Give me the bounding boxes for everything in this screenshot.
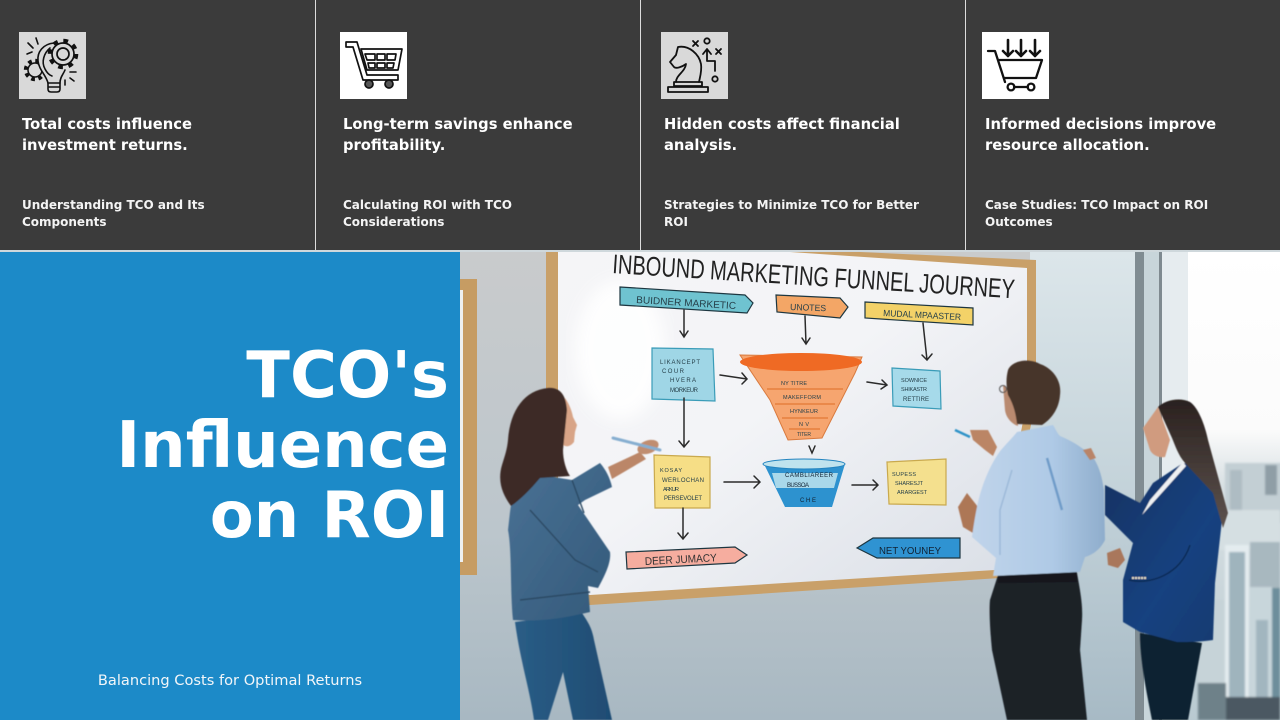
handwritten labels: BUIDNER MARKETIC [636, 295, 736, 312]
handwritten labels: DEER JUMACY [645, 552, 718, 568]
card 3: hidden costs [661, 32, 919, 229]
person: man in blue shirt [955, 361, 1105, 720]
subheading: understanding TCO: Understanding TCO and Its Components [22, 198, 205, 229]
heading: total costs: Total costs influence investment returns. [22, 116, 192, 154]
person: woman in navy blazer [1083, 400, 1228, 720]
whiteboard [546, 249, 1036, 610]
person: woman in denim jacket [500, 388, 661, 720]
handwritten labels: CAMBLIAREER [785, 473, 834, 479]
funnel [740, 353, 862, 440]
subheading: calculating ROI: Calculating ROI with TCO Considerations [343, 198, 512, 229]
title: TCO's [246, 339, 449, 413]
card 2: long-term savings [340, 32, 573, 229]
handwritten labels: SHARESJT [895, 481, 924, 487]
handwritten labels: SHIKASTR [901, 387, 927, 393]
framed picture at left [460, 279, 477, 575]
background: office wall and window [460, 252, 1280, 720]
handwritten labels: ARKUR [663, 487, 679, 493]
handwritten labels: UNOTES [790, 302, 826, 313]
handwritten labels: NV [799, 422, 809, 428]
handwritten labels: PERSEVOLET [664, 496, 702, 502]
heading: informed decisions: Informed decisions improve resource allocation. [985, 116, 1216, 154]
handwritten labels: LIKANCEPT [660, 360, 700, 366]
heading: long-term savings: Long-term savings enhance profitability. [343, 116, 573, 154]
heading: hidden costs: Hidden costs affect financial analysis. [664, 116, 900, 154]
handwritten labels [636, 295, 962, 568]
handwritten labels: HVERA [670, 378, 696, 384]
handwritten labels: HYNKEUR [790, 409, 818, 415]
icon: shopping cart with grid [340, 32, 407, 99]
title: Influence [116, 409, 449, 483]
subtitle: Balancing Costs for Optimal Returns [98, 672, 362, 689]
handwritten labels: MAKEFFORM [783, 395, 821, 401]
handwritten labels: NET YOUNEY [879, 546, 941, 557]
handwritten labels: SUPESS [892, 472, 916, 478]
handwritten labels: RETTIRE [903, 397, 929, 403]
bowl [763, 459, 845, 507]
handwritten labels: NY TITRE [781, 381, 807, 387]
handwritten labels: BUSSOA [787, 483, 809, 489]
handwritten labels: WERLOCHAN [662, 478, 704, 484]
handwritten labels: TITER [797, 432, 811, 438]
city skyline through window [1198, 463, 1280, 720]
title: on ROI [210, 479, 449, 553]
subheading: case studies: Case Studies: TCO Impact on ROI Outcomes [985, 198, 1208, 229]
handwritten labels: COUR [662, 369, 685, 375]
icon: chess knight strategy [661, 32, 728, 99]
divider 2 [640, 0, 641, 250]
flow tags [620, 287, 973, 569]
handwritten labels: ARARGEST [897, 490, 928, 496]
illustration: team at whiteboard with marketing funnel [460, 252, 1280, 720]
icon: cart with down arrows [982, 32, 1049, 99]
icon: lightbulb with gears [19, 32, 86, 99]
handwritten labels: MUDAL MPAASTER [883, 308, 962, 322]
card 1: total costs [19, 32, 205, 229]
divider 1 [315, 0, 316, 250]
title [116, 339, 449, 553]
handwritten labels: CHE [800, 498, 816, 504]
handwritten labels: KOSAY [660, 468, 682, 474]
handwritten labels: SOWNICE [901, 378, 927, 384]
divider 3 [965, 0, 966, 250]
panel: blue title panel [0, 252, 460, 720]
top band: four key points [0, 0, 1280, 250]
subheading: strategies: Strategies to Minimize TCO for Better ROI [664, 198, 919, 229]
card 4: informed decisions [982, 32, 1216, 229]
handwritten labels: MORKEUR [670, 388, 699, 394]
arrows [678, 310, 932, 539]
